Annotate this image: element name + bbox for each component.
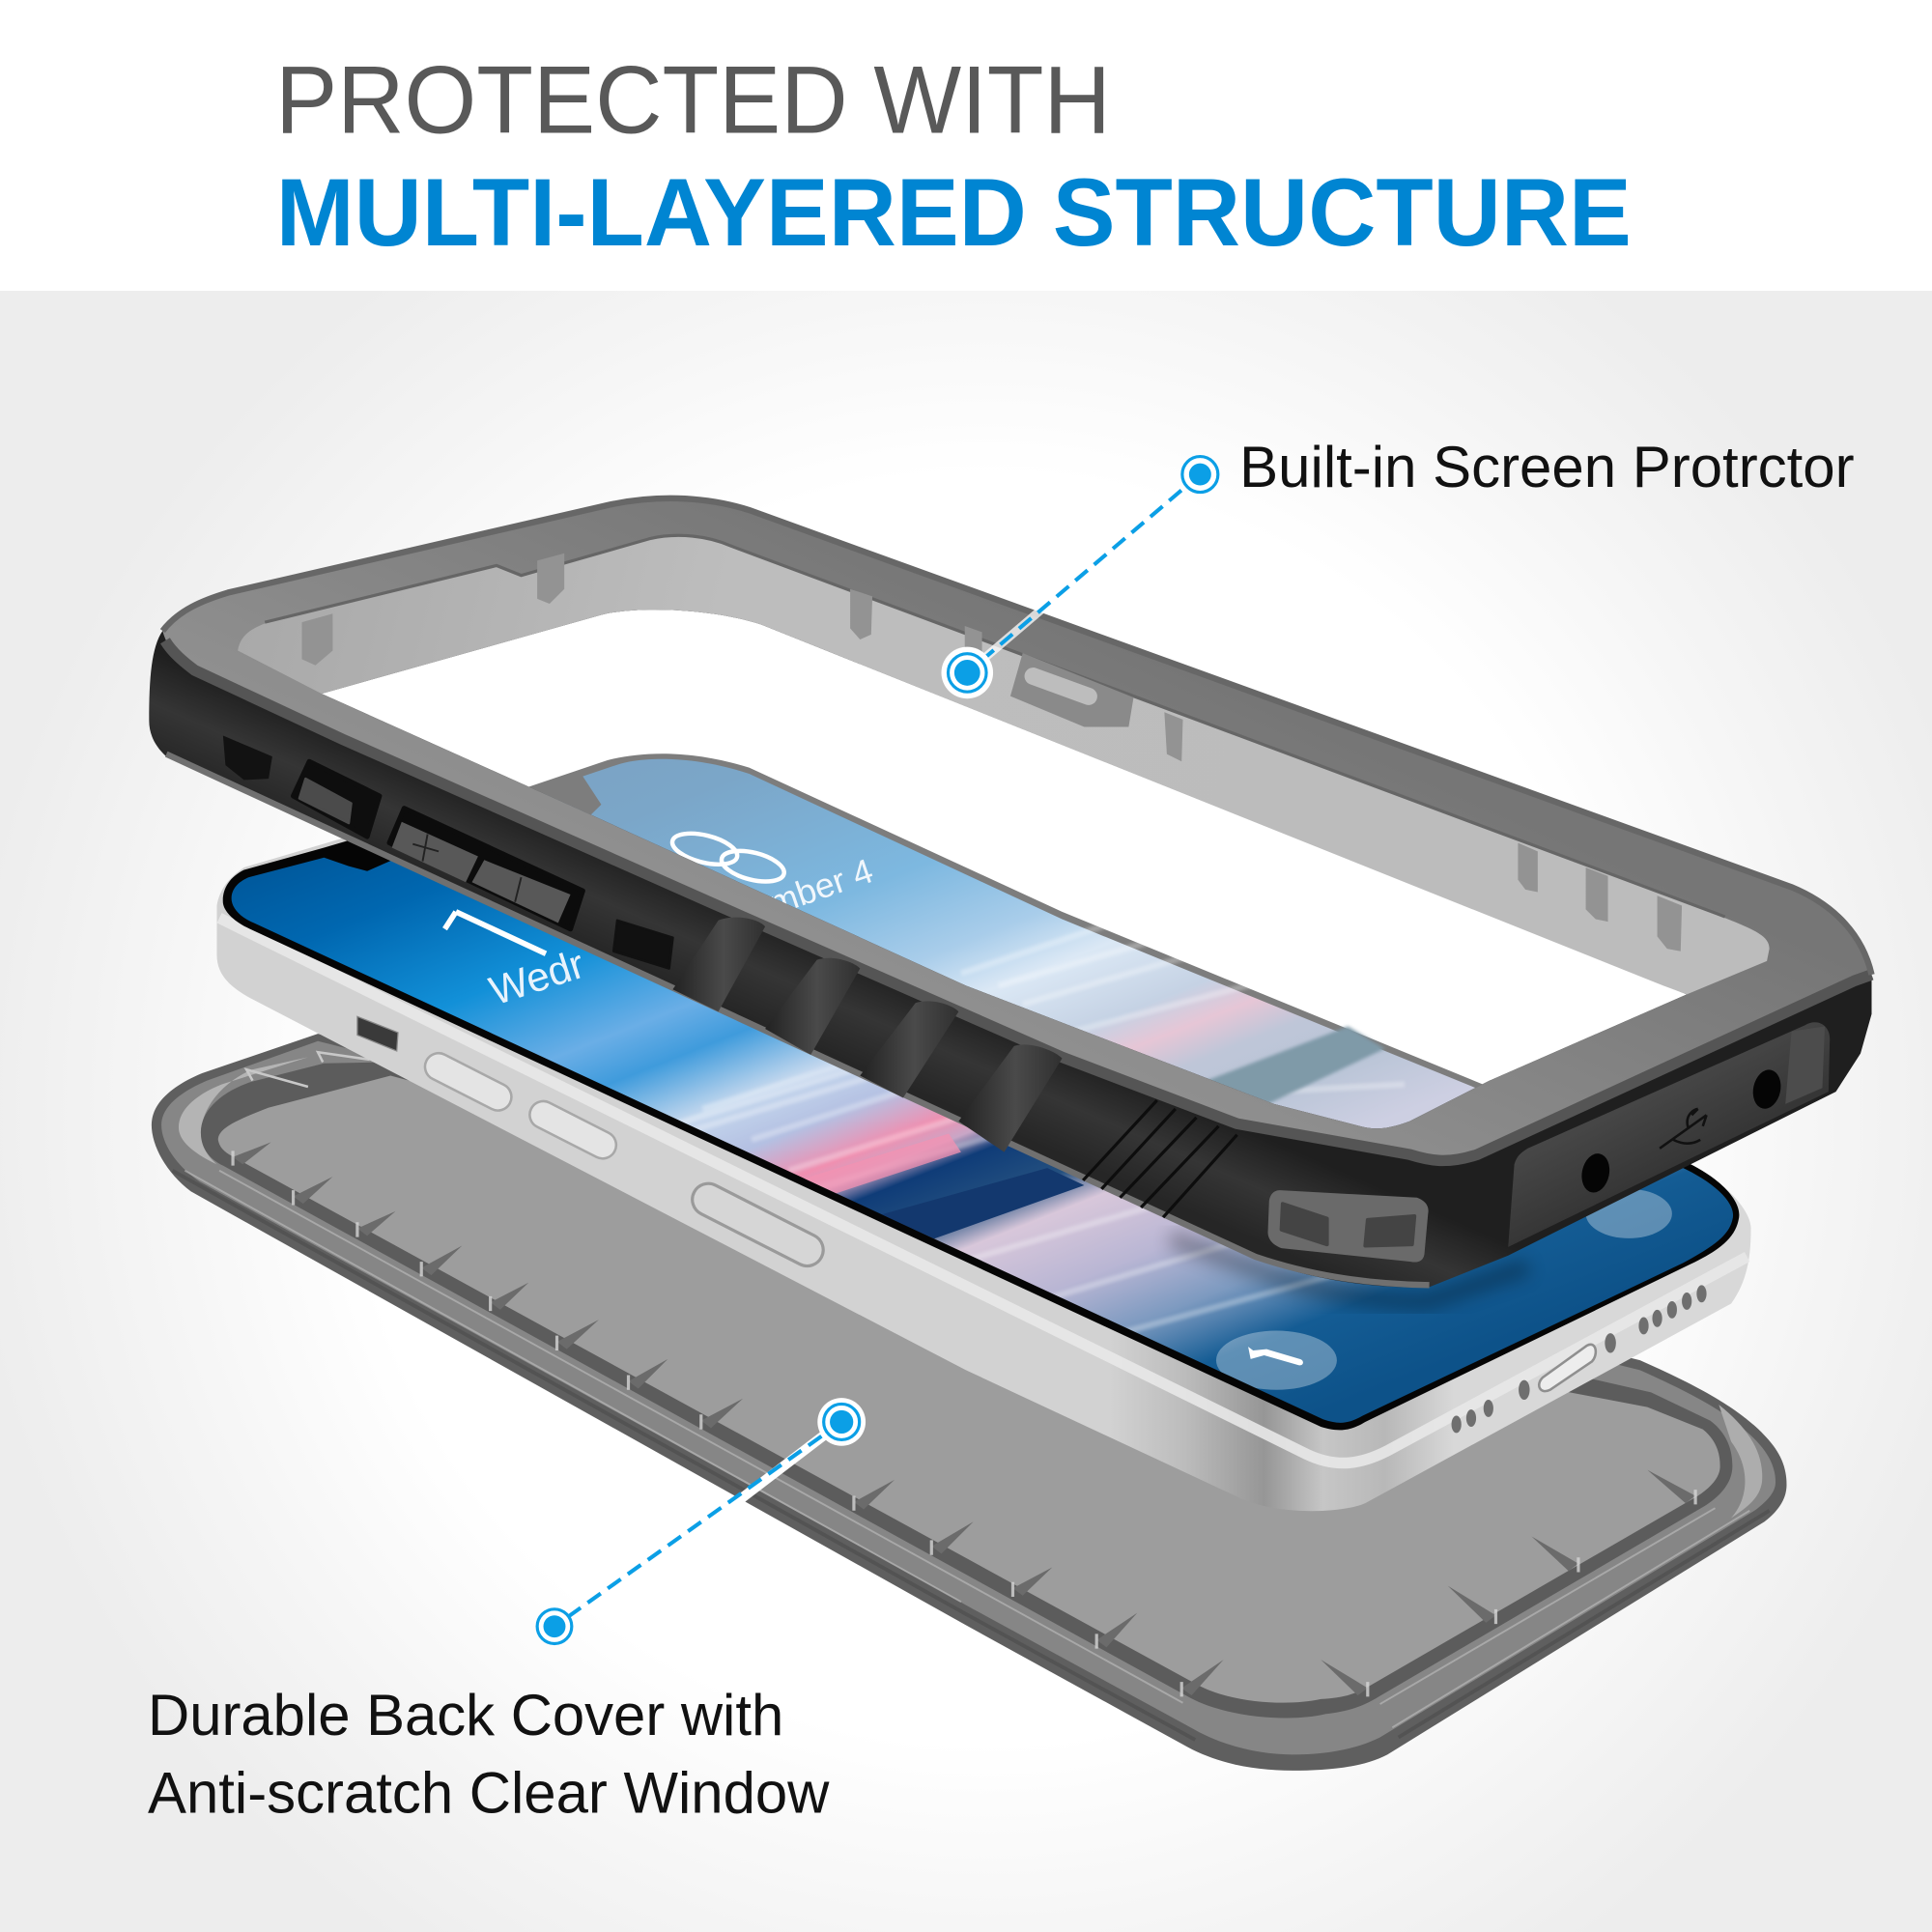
back cover: outer dark stripe [173,1171,1770,1740]
flashlight icon [1248,1347,1303,1365]
phone [210,739,1762,1511]
frame: camera grommet [1267,1190,1429,1263]
window: clock digit [670,831,786,884]
frame: cap hole left [1578,1151,1613,1195]
frame: port cap [1508,1022,1830,1247]
frame: grommet hole left [1282,1204,1327,1244]
callout line: blue dashes [554,1422,841,1627]
phone: lock screen wallpaper [232,794,1733,1423]
frame: cap end ridge [1785,1026,1825,1104]
frame: volume plus button [392,822,478,882]
callout anchor ring [824,1404,860,1439]
bumper frame [149,498,1872,1288]
callout end dot [543,1615,565,1637]
back cover: rim highlight lines [185,1171,1749,1727]
frame: inner button slot [1010,653,1133,727]
frame: volume minus button [472,860,571,923]
frame: cap hole right [1749,1067,1784,1111]
back cover: light corner rim left [179,1057,308,1164]
frame: light inner wall [238,537,1770,994]
back cover: inner dark ledge [201,1062,1732,1718]
flashlight button [1216,1331,1337,1390]
frame: dark far edge [162,498,1872,975]
frame: wall top shadow line [265,535,1725,917]
frame: plus and minus marks [412,835,522,902]
back cover: retention fins [233,1142,1695,1695]
phone: power button [687,1178,829,1271]
callout anchor halo [941,647,993,698]
callout end dot [1189,464,1211,486]
callout line: white halo [967,474,1200,672]
icon: usb symbol [1660,1109,1707,1149]
label: built-in screen protector: Built-in Screen Protrctor [1239,435,1855,499]
back cover: light corner rim right [1719,1405,1762,1518]
back cover: corner clip tabs [246,1052,370,1087]
frame: grommet hole right [1365,1216,1414,1246]
day label on lower screen: Wedr [484,941,589,1013]
frame: grip ribs [672,918,1062,1152]
label: durable back cover line two: Anti-scratch Clear Window [148,1760,830,1825]
frame: grey top lip [162,498,1872,1160]
phone: silver body [216,764,1751,1511]
callout anchor halo [817,1398,866,1446]
callout line: white halo [727,1422,841,1509]
callout anchor dot [830,1410,853,1434]
wallpaper: dark sea [881,1168,1084,1238]
frame: inner wall tabs [301,554,1682,952]
callout anchor ring [949,654,986,692]
window: light wallpaper [583,759,1475,1128]
frame: right side stub [613,921,672,969]
phone: bottom speaker and port [1452,1285,1707,1433]
callout: back cover [537,1398,866,1644]
back cover: translucent rim [161,1041,1776,1754]
callout end marker [1182,457,1218,493]
window: sea reflection [1200,1026,1385,1104]
window: grey phone edge [529,753,1482,1128]
frame shadow on phone [1171,1238,1528,1301]
back cover: clear window floor [218,1076,1720,1703]
callout anchor dot [954,660,980,686]
back cover [152,1034,1786,1771]
camera button [1586,1189,1672,1238]
back cover: outer shell [152,1034,1786,1771]
phone: volume down button [526,1096,621,1163]
phone: side bevel [219,918,1747,1463]
frame: dark lip shading near edge [165,640,1872,1160]
frame: lower grey edge [166,754,1430,1285]
phone: volume up button [420,1048,516,1115]
frame: mute switch cover [294,761,380,837]
back cover: fin highlights [233,1151,1695,1696]
label: durable back cover line one: Durable Back Cover with [148,1683,783,1747]
window: date label: mber 4 [764,851,878,923]
window: cloud streaks [961,925,1405,1094]
frame: ridge lines [1083,1100,1237,1217]
frame: black outer body [149,498,1872,1288]
frame: mute switch face [299,779,352,823]
wallpaper: pink horizon [804,1134,961,1194]
callout end marker [537,1609,572,1644]
charging port [1539,1345,1596,1391]
title: line two: MULTI-LAYERED STRUCTURE [276,159,1632,267]
frame: inner button recess [1022,666,1099,707]
window: white backdrop [524,753,1492,1084]
phone: mute switch [357,1016,398,1051]
title: line one: PROTECTED WITH [275,47,1111,155]
frame: left corner stub [223,735,272,780]
frame: volume button recess [389,809,582,929]
wallpaper: cloud streaks [678,1065,1333,1333]
callout line: blue dashes [967,474,1200,672]
clock digit on lower screen [444,912,546,953]
see-through screen in frame window [524,753,1492,1128]
callout: screen protector [941,457,1218,698]
phone: black screen border [223,753,1739,1430]
